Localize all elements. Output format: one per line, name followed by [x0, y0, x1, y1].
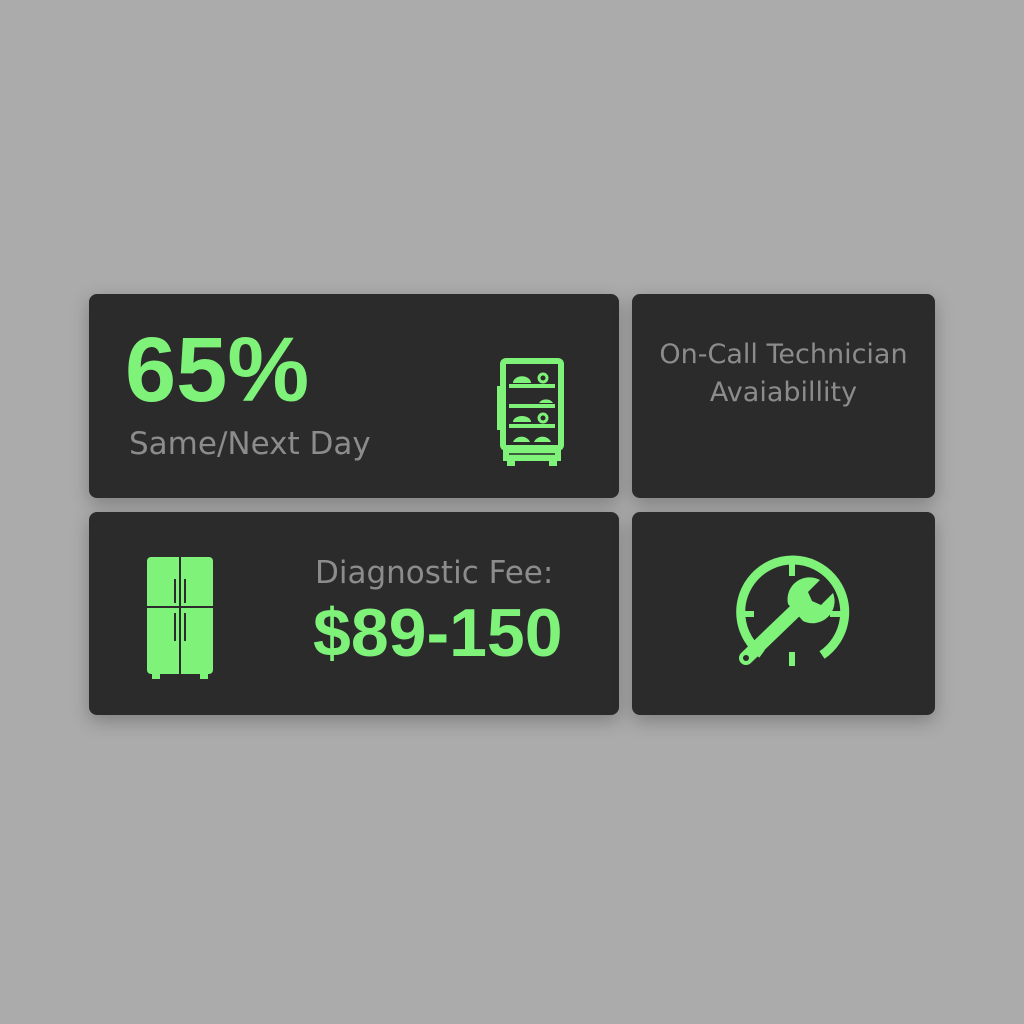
panel: wrench clock icon — [632, 512, 935, 715]
label: same/next day: Same/Next Day — [129, 426, 371, 462]
panel: diagnostic fee — [89, 512, 619, 715]
heading: on-call technician availability: Avaiabillity — [710, 377, 857, 408]
icon: display fridge — [497, 358, 564, 466]
heading: on-call technician availability: On-Call Technician — [659, 339, 908, 370]
stat: 65%: 65% — [125, 319, 309, 421]
panel: on-call technician — [632, 294, 935, 498]
label: diagnostic fee: Diagnostic Fee: — [315, 555, 553, 591]
stat: $89-150: $89-150 — [313, 595, 563, 671]
icon: french door fridge — [147, 557, 213, 679]
icon: wrench in clock — [736, 556, 850, 666]
panel: same/next day — [89, 294, 619, 498]
heading: on-call technician availability — [659, 339, 908, 408]
